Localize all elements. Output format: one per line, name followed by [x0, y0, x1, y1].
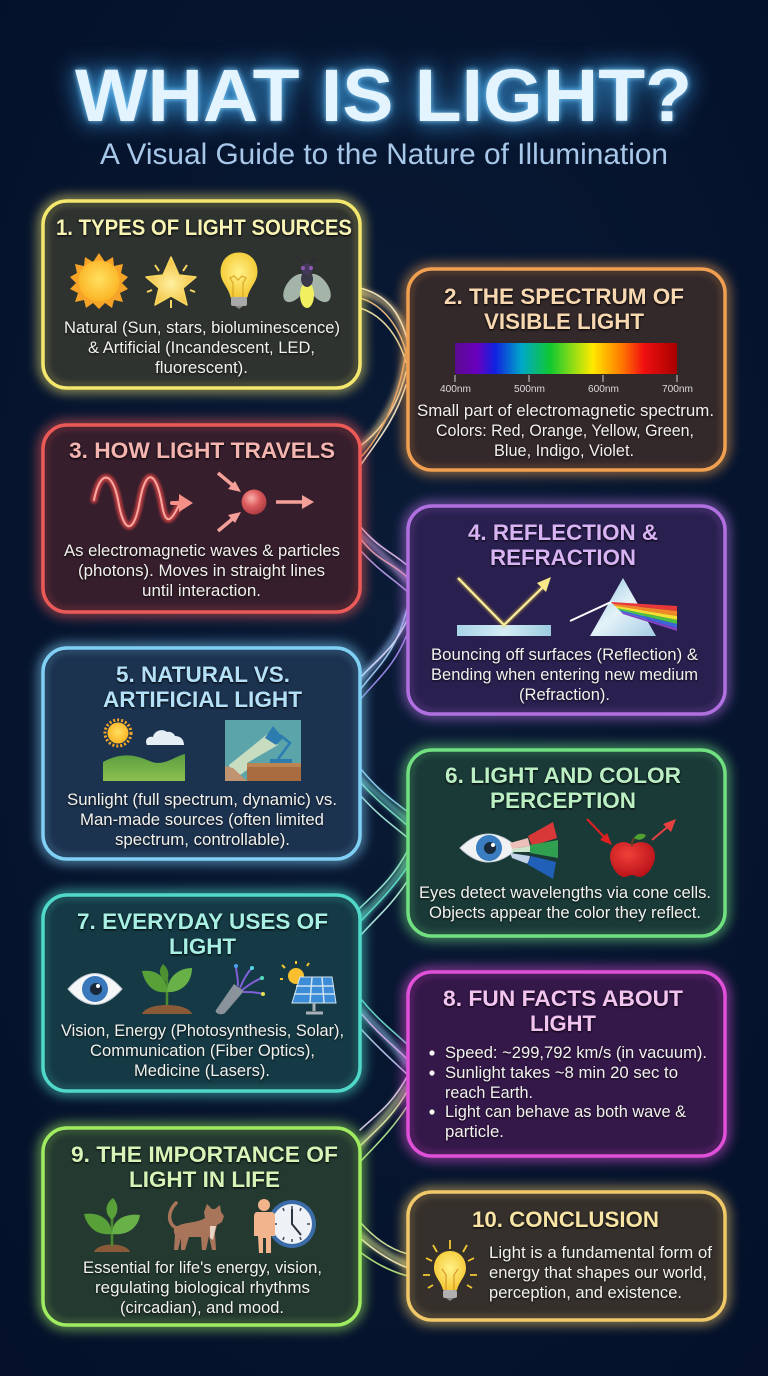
panel 2: spectrum of visible light [408, 269, 725, 470]
heading [71, 1142, 338, 1192]
chart: visible spectrum: 500nm [514, 384, 545, 395]
text: Eyes detect wavelengths via cone cells. [419, 884, 711, 902]
panel 5: natural vs artificial light [43, 648, 360, 859]
icon: sun and solar panel [280, 961, 336, 1013]
text: spectrum, controllable). [115, 831, 290, 849]
text: Natural (Sun, stars, bioluminescence) [64, 319, 340, 337]
icon: natural landscape [103, 720, 185, 781]
panel 6: light and color perception [408, 750, 725, 936]
heading: PERCEPTION [490, 788, 636, 813]
icon: light bulb [221, 253, 257, 309]
text: regulating biological rhythms [95, 1279, 310, 1297]
icon: fiber optic cable [216, 964, 265, 1014]
panel 7: everyday uses of light [43, 895, 360, 1091]
heading: REFRACTION [490, 545, 636, 570]
icon: eye [68, 974, 122, 1004]
text: Vision, Energy (Photosynthesis, Solar), [61, 1022, 344, 1040]
text: (circadian), and mood. [120, 1299, 284, 1317]
icon: reflection [457, 577, 551, 636]
heading [443, 986, 684, 1036]
text [489, 1244, 712, 1302]
text [417, 402, 714, 460]
text: Light is a fundamental form of [489, 1244, 712, 1262]
text [431, 646, 698, 704]
text: until interaction. [142, 582, 261, 600]
text: Essential for life's energy, vision, [83, 1259, 322, 1277]
text: Medicine (Lasers). [134, 1062, 270, 1080]
text [64, 542, 340, 600]
icon: photon particle with arrows [218, 473, 314, 531]
text: Bouncing off surfaces (Reflection) & [431, 646, 698, 664]
text [67, 791, 337, 849]
panel 10: conclusion [408, 1192, 725, 1320]
heading: LIGHT [169, 934, 237, 959]
heading [77, 909, 328, 959]
text: (Refraction). [519, 686, 610, 704]
icon: wave with arrow [94, 477, 193, 526]
chart: visible spectrum: 700nm [662, 384, 693, 395]
panel 3: how light travels [43, 425, 360, 612]
heading: 4. REFLECTION & [468, 520, 658, 545]
icon: glowing bulb [423, 1240, 477, 1301]
text: As electromagnetic waves & particles [64, 542, 340, 560]
heading [444, 284, 684, 334]
heading: LIGHT [530, 1011, 597, 1036]
heading: LIGHT IN LIFE [129, 1167, 280, 1192]
title: WHAT IS LIGHT? [75, 54, 692, 137]
icon: plant [84, 1198, 140, 1252]
heading: 6. LIGHT AND COLOR [445, 763, 681, 788]
bullet list: reach Earth. [445, 1084, 533, 1102]
subtitle: A Visual Guide to the Nature of Illumination [100, 138, 668, 171]
icon: eye with cones [460, 822, 558, 879]
bullet list: Speed: ~299,792 km/s (in vacuum). [445, 1044, 707, 1062]
text: Bending when entering new medium [431, 666, 698, 684]
text: fluorescent). [155, 359, 248, 377]
icon: sprout [142, 964, 192, 1014]
heading [445, 763, 681, 813]
text [83, 1259, 322, 1317]
icon: person with clock [254, 1199, 316, 1253]
text: Small part of electromagnetic spectrum. [417, 402, 714, 420]
heading: 10. CONCLUSION [472, 1207, 659, 1232]
bullet list [429, 1044, 707, 1141]
light strands connecting panels [360, 288, 408, 1276]
heading: ARTIFICIAL LIGHT [103, 687, 303, 712]
text [61, 1022, 344, 1080]
text: Sunlight (full spectrum, dynamic) vs. [67, 791, 337, 809]
bullet list: Sunlight takes ~8 min 20 sec to [445, 1064, 678, 1082]
icon: desk lamp scene [225, 720, 301, 781]
chart: visible spectrum [440, 343, 693, 395]
text: (photons). Moves in straight lines [78, 562, 325, 580]
bullet list: particle. [445, 1123, 504, 1141]
text [64, 319, 340, 377]
icon: sun [70, 253, 128, 309]
bullet list: Light can behave as both wave & [445, 1103, 686, 1121]
icon: star [146, 257, 196, 308]
icon: firefly [278, 258, 336, 308]
text: Man-made sources (often limited [80, 811, 324, 829]
heading: VISIBLE LIGHT [484, 309, 645, 334]
panel 8: fun facts about light [408, 972, 725, 1156]
heading: 2. THE SPECTRUM OF [444, 284, 684, 309]
text: Colors: Red, Orange, Yellow, Green, [436, 422, 694, 440]
text: Objects appear the color they reflect. [429, 904, 701, 922]
heading: 5. NATURAL VS. [116, 662, 290, 687]
heading: 7. EVERYDAY USES OF [77, 909, 328, 934]
text [419, 884, 711, 922]
heading: 3. HOW LIGHT TRAVELS [69, 438, 335, 463]
heading: 9. THE IMPORTANCE OF [71, 1142, 338, 1167]
chart: visible spectrum: 400nm [440, 384, 471, 395]
chart: visible spectrum: 600nm [588, 384, 619, 395]
heading [468, 520, 658, 570]
text: Blue, Indigo, Violet. [494, 442, 634, 460]
text: & Artificial (Incandescent, LED, [88, 339, 315, 357]
text: Communication (Fiber Optics), [90, 1042, 315, 1060]
panel 1: types of light sources [43, 201, 360, 388]
text: energy that shapes our world, [489, 1264, 707, 1282]
icon: apple with arrows [587, 819, 676, 877]
panel 9: importance of light in life [43, 1128, 360, 1325]
heading: 1. TYPES OF LIGHT SOURCES [56, 215, 352, 240]
heading: 8. FUN FACTS ABOUT [443, 986, 684, 1011]
icon: cat [170, 1203, 224, 1250]
text: perception, and existence. [489, 1284, 682, 1302]
heading [103, 662, 303, 712]
icon: prism with rainbow [570, 578, 677, 636]
panel 4: reflection and refraction [408, 506, 725, 714]
